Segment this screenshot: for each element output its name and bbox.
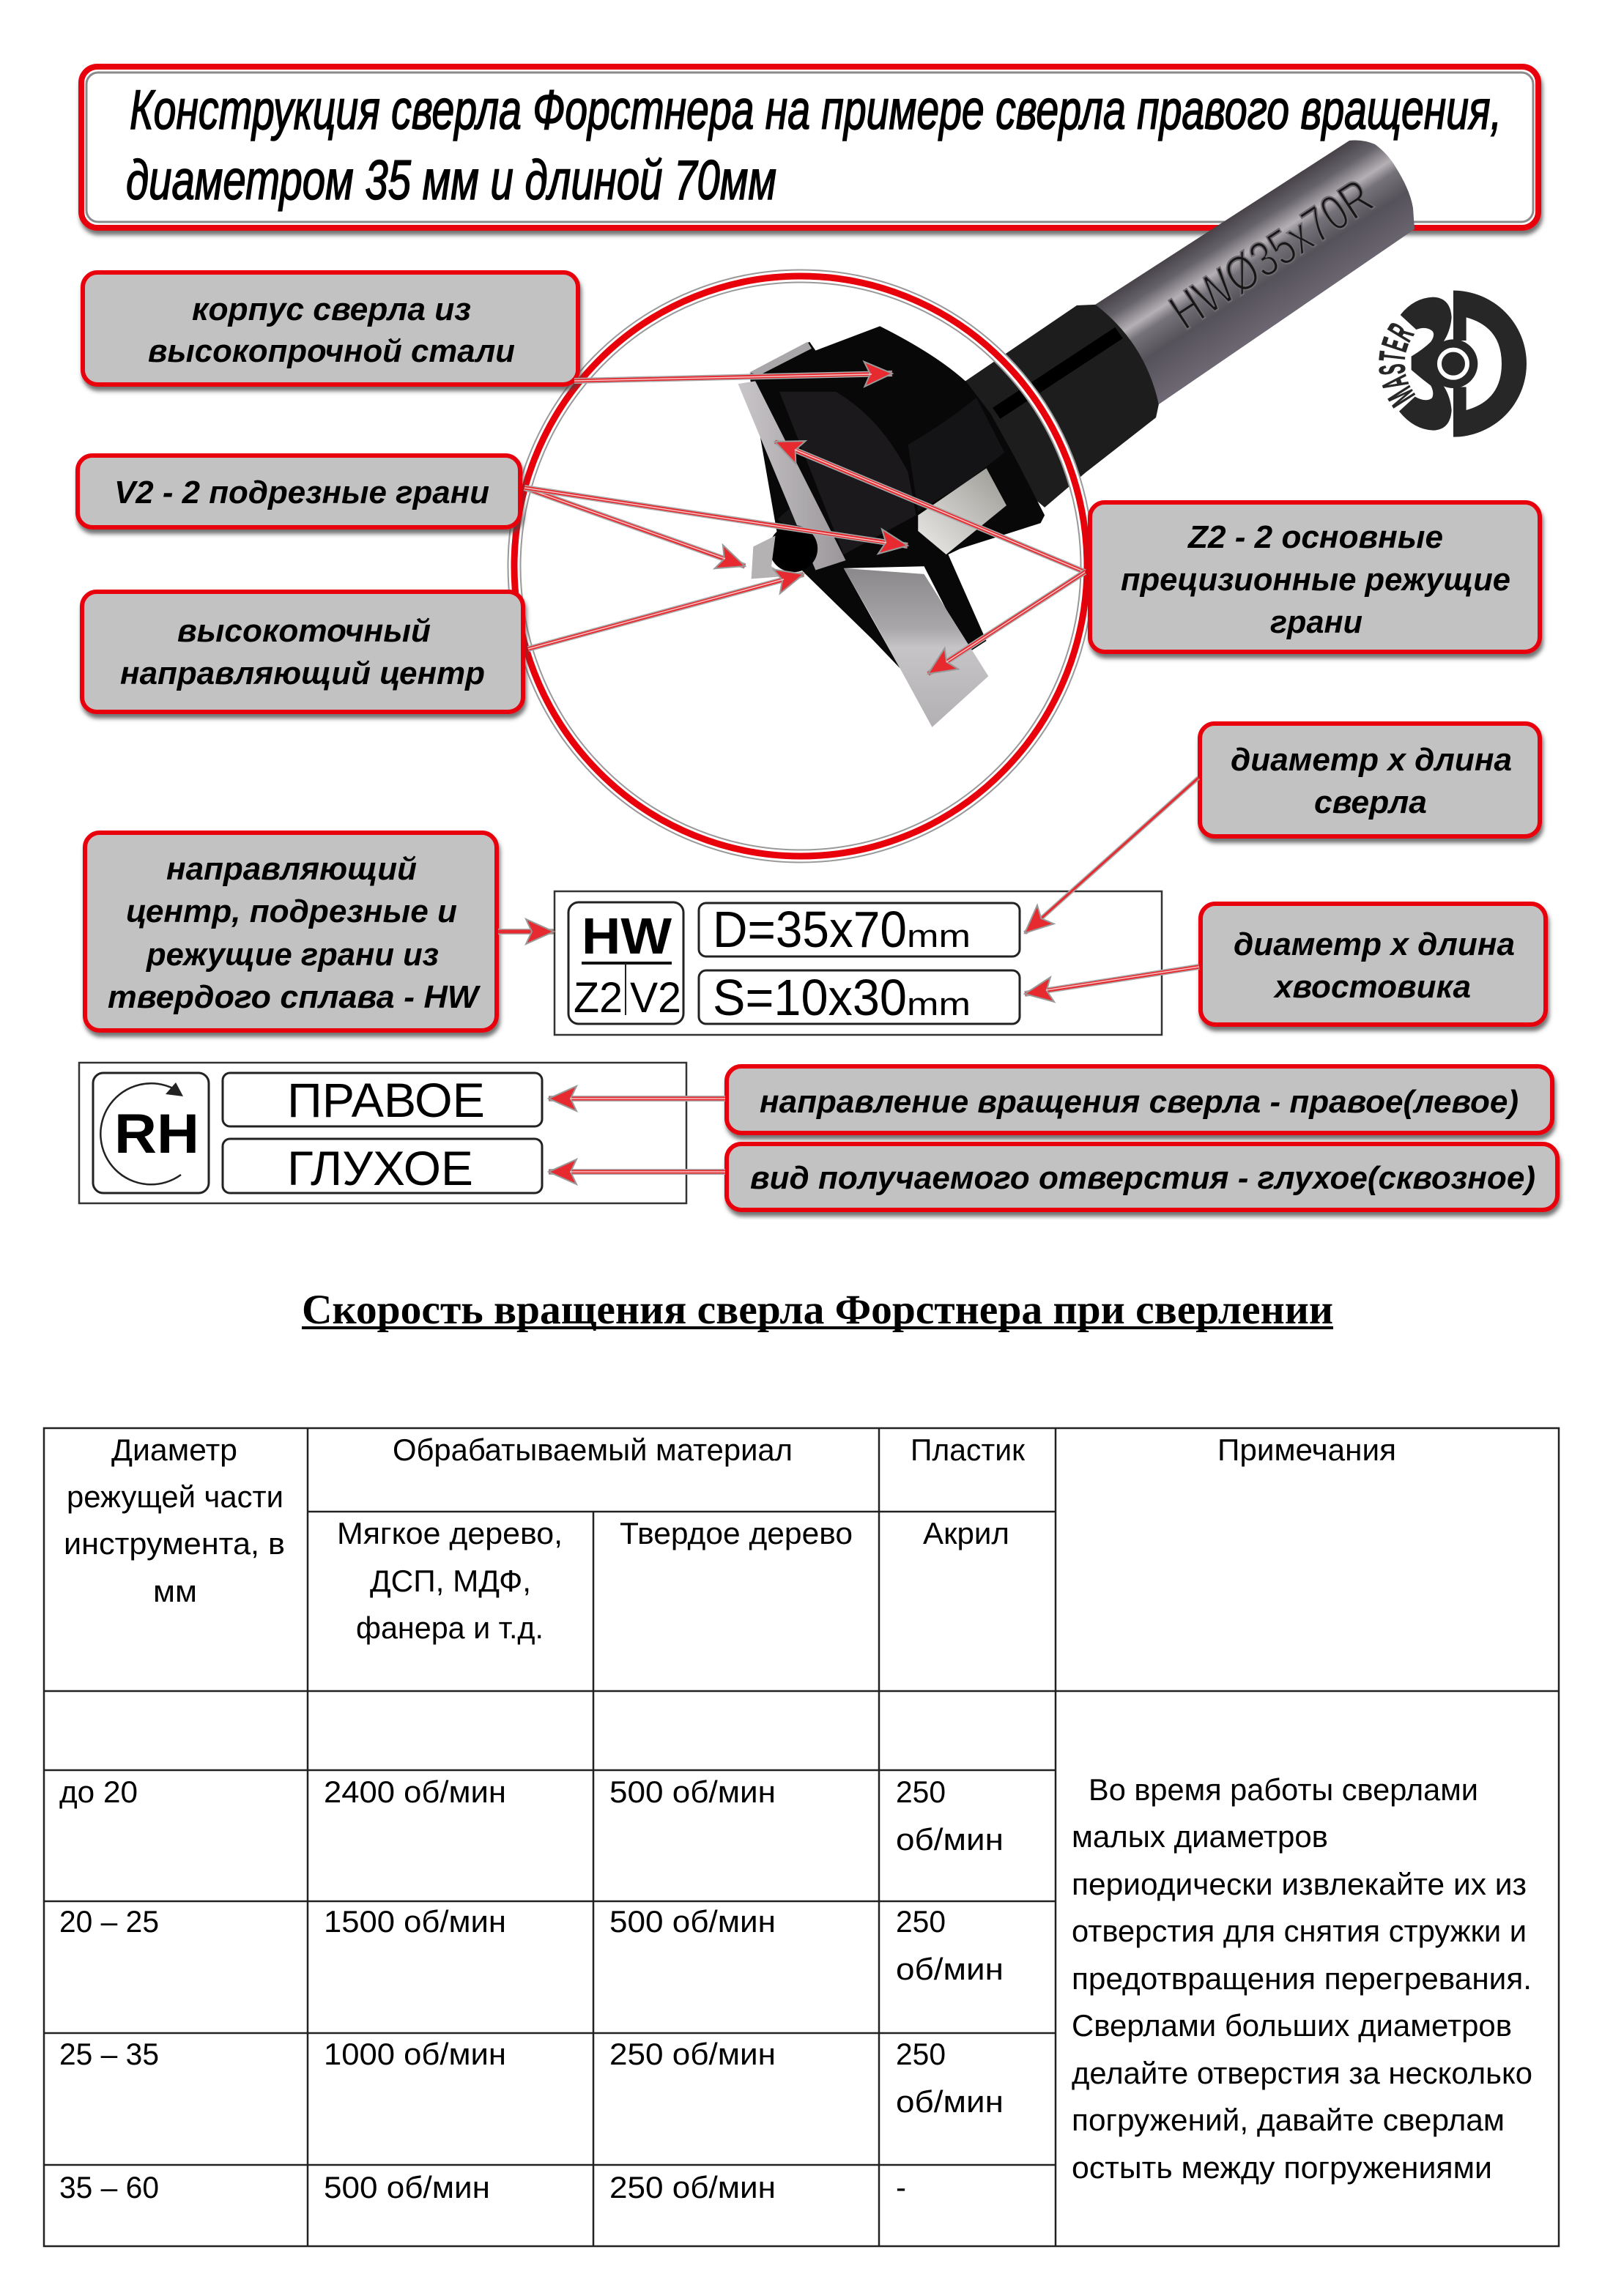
table grid [44, 1428, 1559, 2246]
notes text: остыть между погружениями [1072, 2150, 1492, 2185]
marking panel: HW: S=10x30 [713, 969, 907, 1026]
callout: направляющий центр: направляющий центр [120, 655, 485, 691]
callout: диаметр сверла [1200, 724, 1540, 836]
callout: твердый сплав: направляющий [166, 851, 417, 887]
row: 20-25: 20 – 25 [59, 1904, 159, 1939]
table header: Твердое дерево [620, 1516, 853, 1550]
table header: мм [153, 1574, 197, 1608]
row: до 20: 2400 об/мин [324, 1775, 506, 1809]
callout: направляющий центр [82, 592, 523, 712]
table header: Мягкое дерево, [337, 1516, 563, 1550]
table header: Акрил [923, 1516, 1009, 1550]
callout: направление вращения [727, 1066, 1552, 1133]
arrow: направляющий центр [528, 574, 804, 649]
notes text [1072, 1772, 1532, 2185]
arrow: корпус [574, 374, 892, 381]
row: 35-60 [59, 2170, 906, 2204]
arrow: V2 к грани [524, 488, 908, 546]
callout: твердый сплав: твердого сплава - HW [108, 979, 481, 1015]
notes text: Во время работы сверлами [1089, 1772, 1478, 1807]
row: 25-35: 250 об/мин [609, 2037, 776, 2071]
row: 20-25 [59, 1904, 1004, 1986]
row: до 20 [59, 1775, 1004, 1857]
table header: фанера и т.д. [356, 1610, 544, 1645]
magnifier circle [514, 276, 1087, 856]
callout: подрезные грани [78, 456, 520, 527]
row: 20-25: 500 об/мин [609, 1904, 776, 1939]
callout: режущие грани: грани [1270, 604, 1362, 640]
shank marking: HWØ35x70R [1160, 168, 1382, 341]
row: 20-25: об/мин [896, 1952, 1004, 1986]
title box [81, 67, 1538, 228]
callout: направляющий центр: высокоточный [177, 613, 431, 649]
arrow: V2 к центру [524, 488, 745, 566]
title text: диаметром 35 мм и длиной 70мм [126, 149, 776, 212]
table header: ДСП, МДФ, [370, 1564, 531, 1598]
row: 20-25: 1500 об/мин [324, 1904, 506, 1939]
callout: режущие грани: Z2 - 2 основные [1187, 519, 1443, 555]
marking panel: HW: V2 [630, 974, 681, 1022]
callout: корпус: корпус сверла из [192, 291, 471, 327]
callout: вид отверстия [727, 1144, 1557, 1210]
arrow: ПРАВОЕ [549, 1096, 725, 1101]
notes text: погружений, давайте сверлам [1072, 2103, 1505, 2137]
notes text: делайте отверстия за несколько [1072, 2056, 1532, 2090]
callout: корпус [83, 272, 578, 384]
marking panel: HW: mm [907, 987, 971, 1022]
marking panel: HW [555, 891, 1162, 1035]
callout: режущие грани [1090, 502, 1540, 652]
row: 25-35: об/мин [896, 2084, 1004, 2119]
icon: rotation arrow [100, 1082, 183, 1184]
arrow: Z2 верхняя грань [775, 442, 1085, 572]
row: 35-60: 35 – 60 [59, 2170, 159, 2204]
arrows [498, 374, 1199, 1172]
row: 35-60: 500 об/мин [324, 2170, 490, 2204]
notes text: Сверлами больших диаметров [1072, 2008, 1512, 2043]
table header: инструмента, в [64, 1526, 285, 1561]
callout: диаметр сверла: диаметр х длина [1231, 742, 1512, 778]
callout: корпус: высокопрочной стали [148, 333, 515, 369]
row: 25-35 [59, 2037, 1004, 2119]
marking panel: RH [79, 1063, 686, 1203]
arrow: HW [498, 929, 554, 935]
marking panel: HW: mm [907, 918, 971, 954]
callout: твердый сплав: режущие грани из [146, 937, 439, 973]
table header: Пластик [911, 1433, 1026, 1467]
callout: направление вращения: направление вращения сверла - правое(левое) [760, 1084, 1519, 1120]
row: 35-60: 250 об/мин [609, 2170, 776, 2204]
callout: твердый сплав [85, 833, 497, 1030]
arrow: ГЛУХОЕ [549, 1169, 725, 1175]
row: 25-35: 250 [896, 2037, 946, 2071]
row: до 20: об/мин [896, 1822, 1004, 1857]
callout: диаметр сверла: сверла [1314, 784, 1427, 820]
table header: Примечания [1217, 1433, 1396, 1467]
row: до 20: 250 [896, 1775, 946, 1809]
title text [126, 79, 1502, 212]
logo wordmark: MASTER [1379, 323, 1415, 409]
callout: твердый сплав: центр, подрезные и [126, 893, 457, 929]
row: 25-35: 25 – 35 [59, 2037, 159, 2071]
table header: Обрабатываемый материал [393, 1433, 793, 1467]
callout: диаметр хвостовика [1201, 904, 1546, 1025]
arrow: Z2 нижняя грань [928, 572, 1085, 674]
notes text: малых диаметров [1072, 1819, 1328, 1854]
arrow: хвостовик [1025, 967, 1199, 994]
arrow: диаметр сверла [1025, 778, 1198, 933]
row: до 20: до 20 [59, 1775, 138, 1809]
table header [64, 1433, 1396, 1645]
callout: режущие грани: прецизионные режущие [1121, 562, 1510, 598]
marking panel: HW: HW [582, 907, 672, 965]
callout: вид отверстия: вид получаемого отверстия - глухое(сквозное) [750, 1160, 1535, 1196]
row: 25-35: 1000 об/мин [324, 2037, 506, 2071]
section heading: Скорость вращения сверла Форстнера при сверлении [302, 1287, 1333, 1333]
drill shank with marking [1095, 141, 1414, 404]
drill head [738, 305, 1159, 727]
speed table [44, 1428, 1559, 2246]
marking panel: RH: ПРАВОЕ [287, 1073, 485, 1127]
marking panel: HW: D=35x70 [713, 901, 907, 958]
marking panel: RH: ГЛУХОЕ [287, 1141, 473, 1195]
table header: Диаметр [111, 1433, 237, 1467]
notes text: предотвращения перегревания. [1072, 1961, 1532, 1996]
marking panel: HW: Z2 [574, 974, 623, 1022]
callout: диаметр хвостовика: хвостовика [1273, 969, 1471, 1005]
notes text: периодически извлекайте их из [1072, 1867, 1527, 1901]
notes text: отверстия для снятия стружки и [1072, 1914, 1527, 1948]
row: 35-60: - [896, 2170, 906, 2204]
row: 20-25: 250 [896, 1904, 946, 1939]
table header: режущей части [67, 1479, 283, 1514]
callout: диаметр хвостовика: диаметр х длина [1234, 926, 1515, 962]
callout: подрезные грани: V2 - 2 подрезные грани [114, 475, 489, 510]
marking panel: RH: RH [114, 1103, 199, 1165]
logo: 3D Master [1379, 290, 1527, 437]
row: до 20: 500 об/мин [609, 1775, 776, 1809]
